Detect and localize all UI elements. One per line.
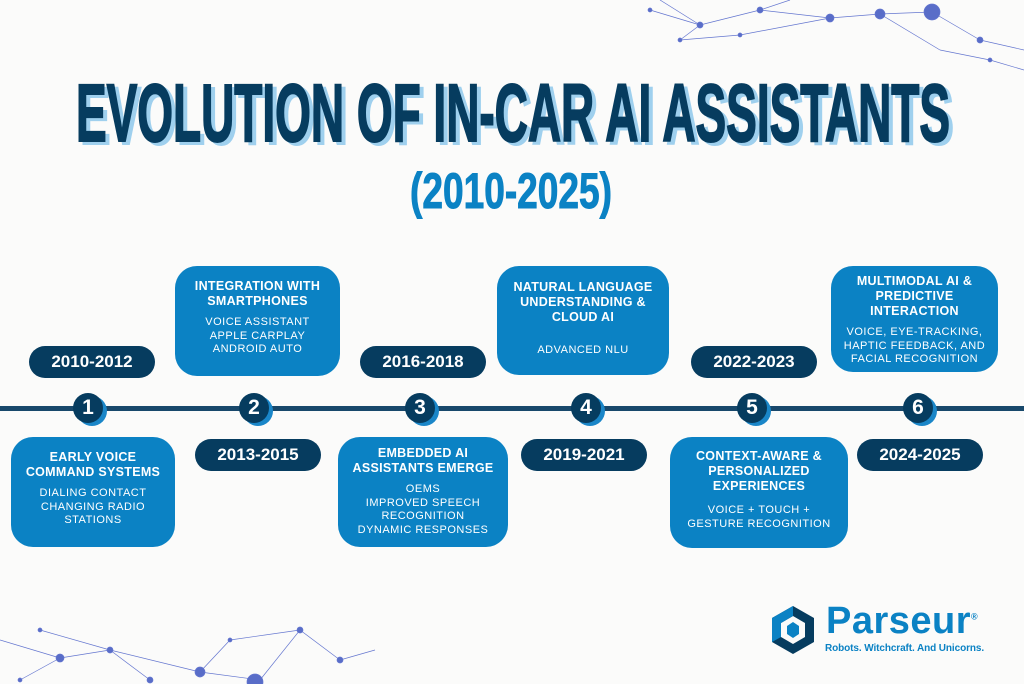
box 6: FACIAL RECOGNITION [851, 353, 978, 365]
network decoration bottom left [0, 626, 376, 684]
box 3: IMPROVED SPEECH [366, 496, 480, 508]
box 1: CHANGING RADIO [41, 500, 145, 512]
box 4: ADVANCED NLU [537, 344, 629, 356]
box 3 [338, 437, 508, 547]
icon: parseur cube [772, 606, 814, 654]
markers [73, 393, 103, 423]
title [76, 68, 954, 219]
box 4: UNDERSTANDING & [520, 295, 646, 309]
text: 2 [248, 396, 260, 419]
text: 6 [912, 396, 924, 419]
box 2: ANDROID AUTO [213, 343, 302, 355]
year pills: 2010-2012 [51, 352, 133, 371]
box 6: PREDICTIVE [875, 289, 954, 303]
box 2: SMARTPHONES [207, 294, 308, 308]
box 3: ASSISTANTS EMERGE [352, 461, 494, 475]
box 5 [670, 437, 848, 548]
box 5: GESTURE RECOGNITION [687, 518, 831, 530]
box 5: CONTEXT-AWARE & [696, 449, 822, 463]
title: (2010-2025) [410, 163, 612, 219]
logo: Robots. Witchcraft. And Unicorns. [825, 643, 984, 654]
box 2: VOICE ASSISTANT [205, 316, 310, 328]
box 3: EMBEDDED AI [378, 446, 468, 460]
box 6: MULTIMODAL AI & [857, 274, 972, 288]
box 4 [497, 266, 669, 375]
text: 2019-2021 [543, 445, 625, 464]
box 5: PERSONALIZED [708, 464, 810, 478]
box 2: APPLE CARPLAY [210, 330, 305, 342]
box 1: STATIONS [64, 514, 122, 526]
box 1: COMMAND SYSTEMS [26, 465, 160, 479]
box 1: EARLY VOICE [50, 450, 136, 464]
text: 2016-2018 [382, 352, 464, 371]
text: 2022-2023 [713, 352, 795, 371]
box 6: INTERACTION [870, 304, 959, 318]
box 6: HAPTIC FEEDBACK, AND [844, 340, 985, 352]
box 3: OEMS [406, 483, 440, 495]
box 4: CLOUD AI [552, 310, 614, 324]
box 3: RECOGNITION [381, 510, 465, 522]
timeline line [0, 406, 1024, 411]
text: 3 [414, 396, 426, 419]
logo [772, 600, 984, 654]
text: 2013-2015 [217, 445, 299, 464]
year pills [29, 346, 155, 378]
box 2 [175, 266, 340, 376]
logo: Parseur® [826, 600, 978, 642]
box 2: INTEGRATION WITH [195, 279, 320, 293]
network decoration top right [648, 0, 1024, 70]
box 1: DIALING CONTACT [40, 487, 146, 499]
markers: 1 [82, 396, 94, 419]
box 5: VOICE + TOUCH + [708, 504, 810, 516]
box 3: DYNAMIC RESPONSES [358, 524, 488, 536]
box 6: VOICE, EYE-TRACKING, [847, 326, 982, 338]
box 4: NATURAL LANGUAGE [513, 280, 653, 294]
text: 4 [580, 396, 592, 419]
box 1 [11, 437, 175, 547]
text: 2024-2025 [879, 445, 961, 464]
text: 5 [746, 396, 758, 419]
box 6 [831, 266, 998, 372]
box 5: EXPERIENCES [713, 479, 805, 493]
